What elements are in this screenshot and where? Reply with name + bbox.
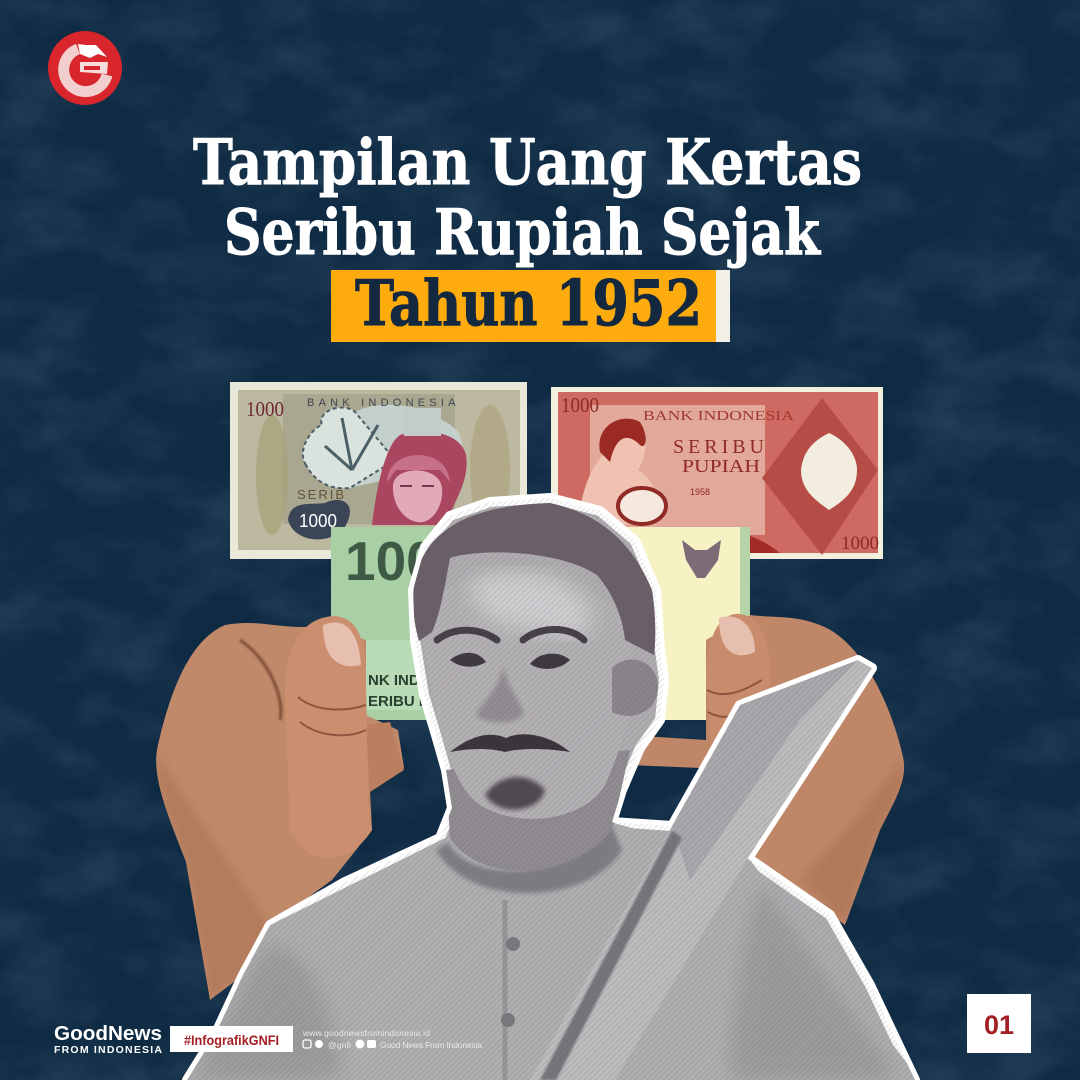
footer contact details (302, 1028, 482, 1050)
face (454, 751, 618, 819)
title (193, 125, 862, 342)
thumb right (706, 614, 770, 790)
neck (446, 750, 630, 871)
hair (413, 503, 655, 655)
eyes (450, 653, 570, 669)
banknote red: SERIBU (673, 436, 765, 458)
note numerals: 1000 (246, 397, 284, 421)
leaf ornament (303, 405, 462, 488)
ear (612, 659, 658, 716)
banknote red (551, 387, 883, 559)
moustache (450, 734, 570, 752)
footer brand: GoodNews From Indonesia (54, 1023, 162, 1056)
title line 3: Tahun 1952 (355, 266, 702, 340)
banknote 1952: SERIB (297, 487, 346, 502)
title line 2: Seribu Rupiah Sejak (224, 195, 821, 269)
title line 1: Tampilan Uang Kertas (193, 125, 862, 199)
logo: GNFI red circle (48, 31, 122, 105)
banknote red: BANK INDONESIA (643, 409, 795, 424)
banknote green modern: 100 (345, 530, 437, 592)
engraver figure (580, 420, 657, 528)
footer contact details: www.goodnewsfromindonesia.id (302, 1028, 430, 1038)
banknote green modern: NK INDON (368, 672, 442, 689)
banknote red: 1000 (841, 533, 879, 554)
dancer face (372, 432, 467, 525)
banknote 1952: BANK INDONESIA (307, 397, 457, 409)
banknote green modern: ERIBU R (368, 693, 430, 710)
garuda emblem (682, 540, 721, 578)
machete (530, 660, 872, 1080)
banknote green modern (331, 527, 750, 720)
banknote red: PUPIAH (682, 456, 760, 476)
note text: 1000 (561, 393, 599, 417)
right hand (626, 614, 904, 925)
footer contact details: @gnfi (328, 1040, 351, 1050)
banknote red: 1958 (690, 487, 710, 497)
banknote 1952 (230, 382, 527, 559)
portrait: man with machete (180, 490, 920, 1080)
footer brand: GoodNews From Indonesia: FROM INDONESIA (54, 1044, 162, 1056)
thumb left (285, 616, 372, 858)
left hand (156, 616, 404, 1000)
cut-out white outline (187, 498, 915, 1080)
goatee (485, 777, 545, 810)
shirt (180, 822, 920, 1080)
footer contact details: Good News From Indonesia (380, 1040, 482, 1050)
page number (967, 994, 1031, 1053)
dark blotch (288, 500, 350, 539)
nose (476, 665, 524, 723)
hashtag label (170, 1026, 293, 1052)
page number: 01 (984, 1010, 1014, 1040)
banknote 1952: 1000 (299, 511, 337, 531)
hashtag label: #InfografikGNFI (184, 1033, 279, 1048)
brows (437, 630, 584, 640)
title highlight bar (331, 270, 730, 342)
footer brand: GoodNews From Indonesia: GoodNews (54, 1023, 162, 1045)
